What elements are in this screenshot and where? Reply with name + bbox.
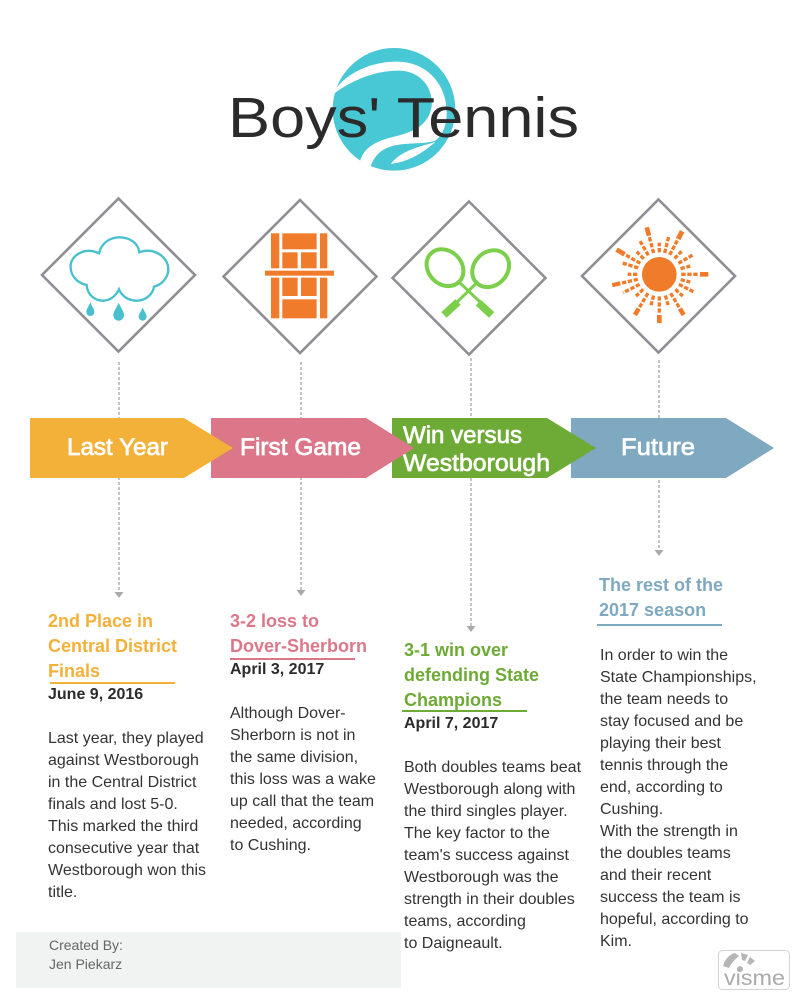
arrow: first game — [211, 418, 414, 478]
heading: last year: Finals — [48, 661, 100, 681]
heading: future — [599, 575, 723, 620]
arrow: first game: First Game — [240, 434, 361, 461]
body: future: and their recent — [600, 867, 711, 884]
body: future — [600, 647, 757, 950]
icon: tennis ball logo — [332, 48, 455, 171]
underline: win versus westborough — [402, 710, 527, 712]
body: future: playing their best — [600, 735, 721, 752]
body: win versus westborough: the third singles player. — [404, 803, 568, 820]
column: first game — [230, 611, 376, 854]
body: first game: up call that the team — [230, 793, 374, 810]
diamond: first game — [224, 200, 376, 353]
body: last year: finals and lost 5-0. — [48, 796, 178, 813]
column: win versus westborough — [402, 640, 581, 952]
heading: future: The rest of the — [599, 575, 723, 595]
date: first game: April 3, 2017 — [230, 661, 324, 678]
body: future: the doubles teams — [600, 845, 731, 862]
body: first game: this loss was a wake — [230, 771, 376, 788]
date: win versus westborough: April 7, 2017 — [404, 715, 498, 732]
footer: creator credit: Created By: — [49, 937, 123, 953]
arrow: future: Future — [621, 434, 695, 461]
heading: first game — [230, 611, 367, 656]
body: win versus westborough: teams, according — [404, 913, 526, 930]
footer: creator credit: Jen Piekarz — [49, 956, 122, 972]
arrow: win versus westborough: Win versus — [403, 422, 522, 449]
diamond: last year — [42, 198, 195, 352]
body: first game — [230, 705, 376, 854]
heading: win versus westborough — [404, 640, 539, 710]
heading: last year — [48, 611, 177, 681]
icon: rain cloud — [71, 237, 168, 321]
body: future: State Championships, — [600, 669, 757, 686]
dashed connector: last year — [114, 362, 124, 598]
arrow: future — [571, 418, 774, 478]
body: last year: Westborough won this — [48, 862, 206, 879]
arrow: win versus westborough — [392, 418, 596, 478]
body: first game: to Cushing. — [230, 837, 311, 854]
dashed connector: first game — [296, 362, 306, 596]
heading: last year: 2nd Place in — [48, 611, 153, 631]
body: win versus westborough: Both doubles teams beat — [404, 759, 581, 776]
body: first game: the same division, — [230, 749, 358, 766]
heading: first game: Dover-Sherborn — [230, 636, 367, 656]
icon: sun — [612, 227, 708, 323]
body: last year: title. — [48, 884, 77, 901]
arrow: last year — [30, 418, 233, 478]
body: future: Cushing. — [600, 801, 663, 818]
footer: creator credit — [49, 937, 123, 972]
body: future: In order to win the — [600, 647, 728, 664]
heading: last year: Central District — [48, 636, 177, 656]
underline: first game — [230, 658, 355, 660]
heading: win versus westborough: defending State — [404, 665, 539, 685]
column: future — [597, 575, 757, 950]
footer background panel — [16, 932, 401, 988]
icon: crossed tennis rackets — [419, 242, 517, 315]
dashed connector: future — [654, 360, 664, 556]
visme badge: visme — [724, 967, 785, 990]
date: last year: June 9, 2016 — [48, 686, 143, 703]
body: future: tennis through the — [600, 757, 728, 774]
body: first game: Sherborn is not in — [230, 727, 355, 744]
body: last year — [48, 730, 206, 901]
column: last year — [48, 611, 206, 901]
body: first game: needed, according — [230, 815, 362, 832]
body: future: Kim. — [600, 933, 632, 950]
body: future: With the strength in — [600, 823, 738, 840]
body: win versus westborough: The key factor to the — [404, 825, 550, 842]
arrow: last year: Last Year — [67, 434, 168, 461]
body: win versus westborough: team's success against — [404, 847, 569, 864]
arrow: win versus westborough: Westborough — [403, 450, 550, 477]
underline: last year — [50, 682, 175, 684]
body: future: the team needs to — [600, 691, 728, 708]
heading: first game: 3-2 loss to — [230, 611, 319, 631]
body: future: stay focused and be — [600, 713, 743, 730]
body: last year: consecutive year that — [48, 840, 199, 857]
body: future: hopeful, according to — [600, 911, 749, 928]
body: win versus westborough: to Daigneault. — [404, 935, 503, 952]
heading: win versus westborough: Champions — [404, 690, 502, 710]
body: win versus westborough: Westborough was the — [404, 869, 558, 886]
body: first game: Although Dover- — [230, 705, 346, 722]
title: Boys' Tennis — [228, 86, 579, 150]
visme badge — [718, 950, 790, 990]
body: last year: Last year, they played — [48, 730, 204, 747]
diamond: win versus westborough — [392, 202, 546, 354]
underline: future — [597, 624, 722, 626]
body: future: success the team is — [600, 889, 740, 906]
heading: future: 2017 season — [599, 600, 706, 620]
body: last year: against Westborough — [48, 752, 199, 769]
body: win versus westborough: strength in their doubles — [404, 891, 575, 908]
body: win versus westborough: Westborough along with — [404, 781, 575, 798]
heading: win versus westborough: 3-1 win over — [404, 640, 508, 660]
dashed connector: win versus westborough — [466, 358, 476, 632]
body: last year: in the Central District — [48, 774, 196, 791]
body: win versus westborough — [404, 759, 581, 952]
body: future: end, according to — [600, 779, 723, 796]
body: last year: This marked the third — [48, 818, 198, 835]
icon: brick wall — [265, 233, 334, 318]
diamond: future — [582, 200, 735, 352]
